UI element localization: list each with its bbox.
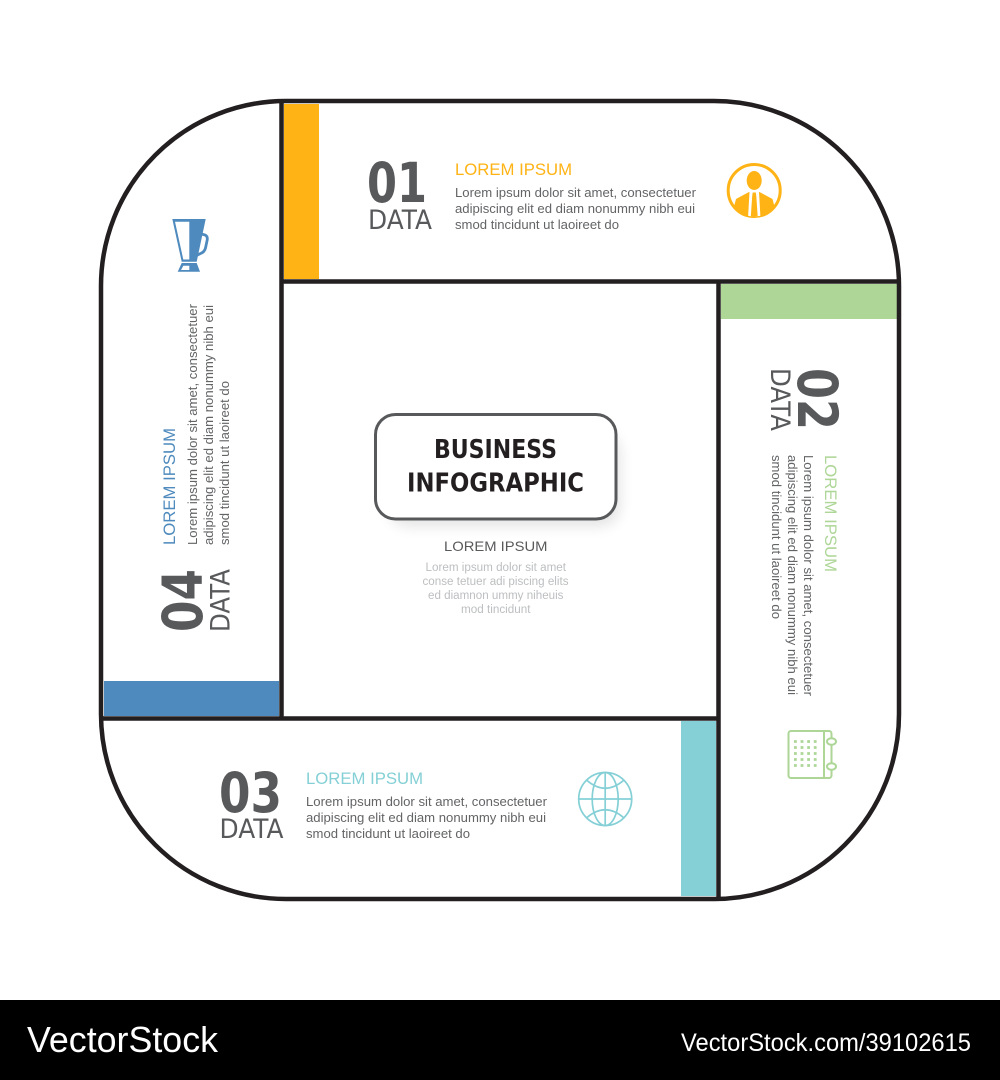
footer URL: VectorStock.com/39102615 — [681, 1029, 971, 1057]
text block 01: adipiscing elit ed diam nonummy nibh eui — [455, 202, 695, 216]
icon: blender cup — [172, 219, 207, 272]
description — [422, 562, 569, 616]
title box — [376, 414, 616, 519]
text block 04: Lorem ipsum dolor sit amet, consectetuer — [186, 304, 200, 545]
text block 04 — [186, 304, 232, 545]
panel: central title — [376, 414, 620, 616]
footer bar — [0, 1000, 1000, 1080]
text block 01: Lorem ipsum dolor sit amet, consectetuer — [455, 186, 696, 200]
description: mod tincidunt — [461, 604, 531, 616]
description: Lorem ipsum dolor sit amet — [426, 562, 567, 574]
heading 02: LOREM IPSUM — [821, 455, 839, 572]
text block 03: Lorem ipsum dolor sit amet, consectetuer — [306, 795, 547, 809]
text block 04: smod tincidunt ut laoireet do — [218, 381, 232, 545]
footer logo: VectorStock — [27, 1019, 219, 1060]
icon: businessman — [728, 164, 780, 218]
panel 01 — [369, 161, 782, 229]
number 02: 02 — [785, 368, 849, 430]
heading 04: LOREM IPSUM — [161, 428, 179, 545]
text block 02 — [769, 455, 815, 696]
title box shadow — [388, 432, 620, 526]
text block 02: Lorem ipsum dolor sit amet, consectetuer — [801, 455, 815, 696]
panel: coloured accent bars — [104, 104, 897, 896]
text block 01: smod tincidunt ut laoireet do — [455, 218, 619, 232]
text block 03: adipiscing elit ed diam nonummy nibh eui — [306, 811, 546, 825]
label DATA 04: DATA — [206, 569, 236, 632]
description: ed diamnon ummy niheuis — [428, 590, 564, 602]
number 01: 01 — [367, 151, 427, 215]
label DATA 03: DATA — [220, 814, 284, 845]
panel 04 — [151, 219, 236, 632]
heading 03: LOREM IPSUM — [306, 770, 423, 788]
number 04: 04 — [151, 569, 215, 632]
text block 02: smod tincidunt ut laoireet do — [769, 455, 783, 619]
text block 01 — [455, 186, 696, 232]
heading 01: LOREM IPSUM — [455, 161, 572, 179]
panel 03 — [219, 761, 632, 845]
text block 03: smod tincidunt ut laoireet do — [306, 827, 470, 841]
title: INFOGRAPHIC — [407, 468, 584, 498]
icon: notebook — [788, 731, 836, 778]
icon: globe — [579, 772, 632, 826]
label DATA 02: DATA — [764, 368, 795, 431]
subtitle: LOREM IPSUM — [444, 538, 548, 554]
text block 04: adipiscing elit ed diam nonummy nibh eui — [202, 305, 216, 545]
label DATA 01: DATA — [368, 205, 432, 236]
text block 02: adipiscing elit ed diam nonummy nibh eui — [785, 455, 799, 695]
panel: rounded frame with inner dividers — [100, 101, 899, 899]
panel 02 — [764, 368, 849, 778]
title: BUSINESS — [434, 435, 557, 465]
title — [407, 435, 584, 498]
text block 03 — [306, 795, 547, 841]
number 03: 03 — [219, 761, 282, 825]
description: conse tetuer adi piscing elits — [422, 576, 569, 588]
